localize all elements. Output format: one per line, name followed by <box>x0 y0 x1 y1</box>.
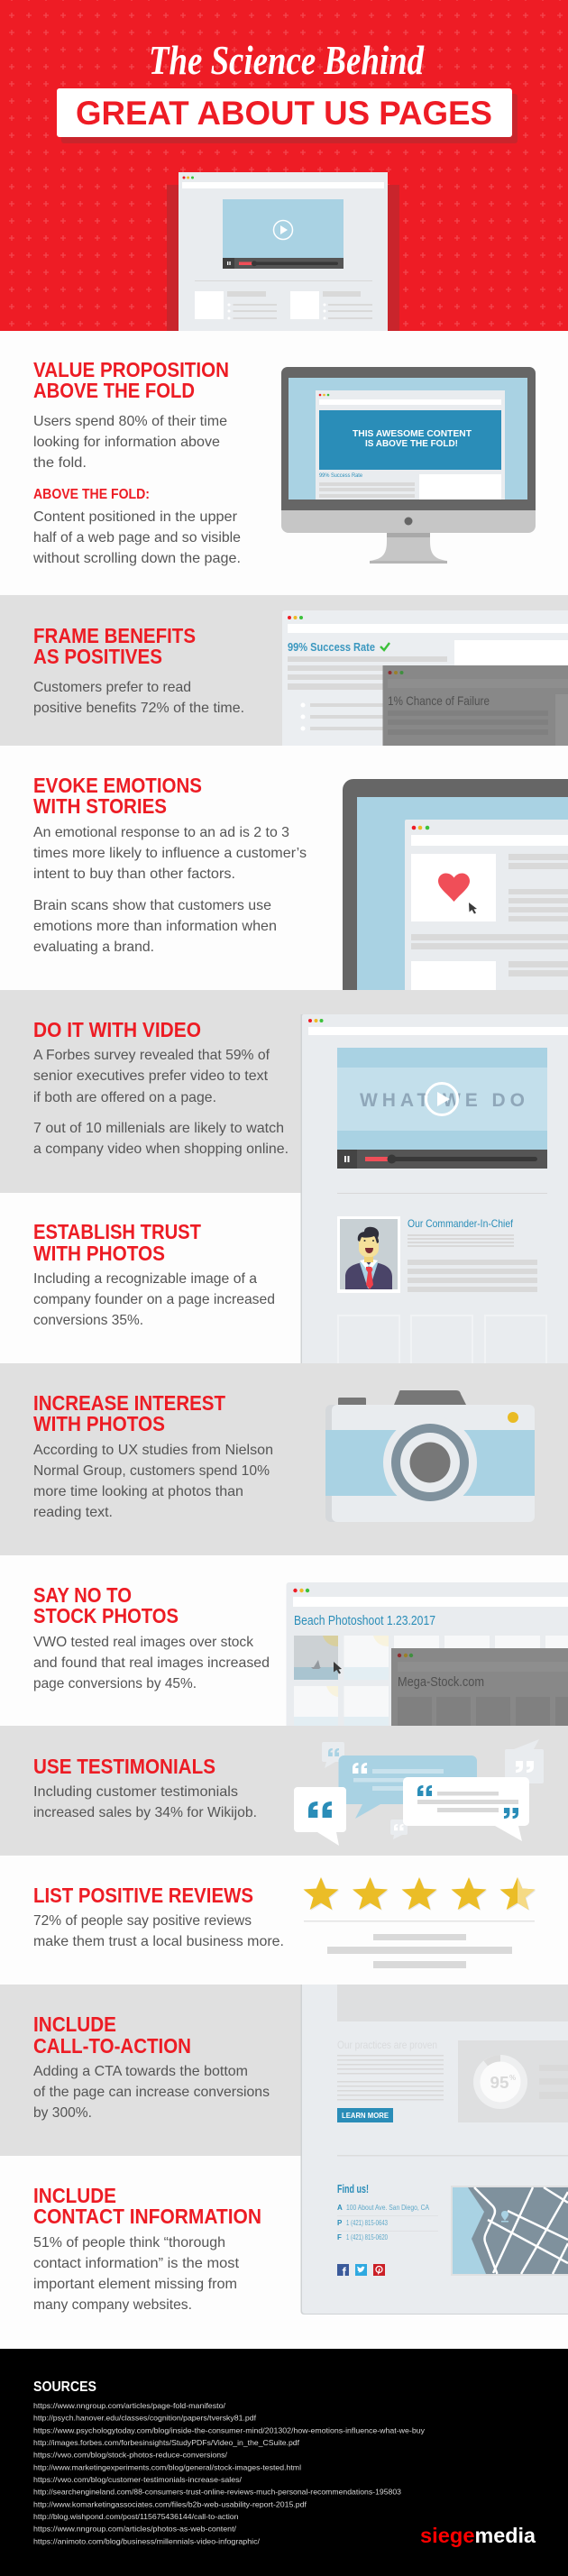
body text <box>33 1048 289 1157</box>
heading: AS POSITIVES <box>33 645 162 668</box>
heading: WITH PHOTOS <box>33 1242 165 1265</box>
heading: WITH STORIES <box>33 794 167 818</box>
browser: success message: 99% Success Rate <box>288 640 375 654</box>
contact details: 1 (421) 815-0643 <box>346 2218 388 2227</box>
body text: important element missing from <box>33 2277 237 2292</box>
stat card with donut: 95 <box>490 2074 508 2092</box>
browser: real photo gallery: Beach Photoshoot 1.23.2017 <box>294 1613 435 1628</box>
heading: INCREASE INTEREST <box>33 1391 225 1415</box>
body text <box>33 2235 240 2313</box>
body text: and found that real images increased <box>33 1655 270 1671</box>
body text: Customers prefer to read <box>33 680 191 695</box>
body text: many company websites. <box>33 2297 192 2313</box>
heading <box>33 1583 179 1627</box>
body text: company founder on a page increased <box>33 1292 275 1307</box>
blue bubble <box>339 1756 477 1819</box>
heading <box>33 1220 201 1265</box>
body text: Brain scans show that customers use <box>33 898 271 913</box>
panel: value proposition above the fold <box>32 358 536 566</box>
body text <box>33 680 244 716</box>
definition text: Content positioned in the upper <box>33 509 238 525</box>
founder portrait <box>337 1216 400 1293</box>
body text: An emotional response to an ad is 2 to 3 <box>33 825 289 840</box>
sources list: http://images.forbes.com/forbesinsights/StudyPDFs/Video_in_the_CSuite.pdf <box>33 2438 300 2447</box>
panel: increase interest with photos <box>0 1363 568 1555</box>
stat card with donut: % <box>509 2074 516 2082</box>
browser with call to action and contact info: Our practices are proven <box>337 2039 437 2051</box>
white bubble left <box>294 1787 346 1846</box>
body text <box>33 2064 270 2121</box>
body text: contact information” is the most <box>33 2256 240 2271</box>
body text: Adding a CTA towards the bottom <box>33 2064 248 2079</box>
learn more button: LEARN MORE <box>342 2111 389 2120</box>
speech bubbles <box>294 1739 544 1846</box>
stat card with donut <box>458 2040 568 2122</box>
heading <box>33 2012 191 2058</box>
white bubble right <box>403 1777 529 1841</box>
panel: include call-to-action <box>0 1985 568 2315</box>
heading: DO IT WITH VIDEO <box>33 1018 201 1041</box>
body text: if both are offered on a page. <box>33 1090 216 1105</box>
definition text: without scrolling down the page. <box>32 551 241 566</box>
body text <box>33 1913 284 1949</box>
body text: of the page can increase conversions <box>33 2085 270 2100</box>
heading: INCLUDE <box>33 2184 116 2207</box>
founder text <box>408 1217 537 1292</box>
heading: VALUE PROPOSITION <box>33 358 229 381</box>
browser illustration with video <box>167 172 399 331</box>
contact details: Find us! <box>337 2182 369 2196</box>
panel: establish trust with photos <box>33 1220 275 1328</box>
heading: USE TESTIMONIALS <box>33 1755 215 1778</box>
sources list: http://psych.hanover.edu/classes/cognition/papers/tversky81.pdf <box>33 2414 257 2423</box>
subheading: ABOVE THE FOLD: <box>33 487 150 502</box>
heading: WITH PHOTOS <box>33 1412 165 1435</box>
sources list: http://www.marketingexperiments.com/blog/general/stock-images-tested.html <box>33 2462 301 2471</box>
title script line: The Science Behind <box>149 37 425 83</box>
body text: 72% of people say positive reviews <box>33 1913 252 1929</box>
heading: ABOVE THE FOLD <box>33 379 195 402</box>
body text: increased sales by 34% for Wikijob. <box>33 1805 257 1820</box>
body text: make them trust a local business more. <box>33 1934 284 1949</box>
siege media logo <box>420 2524 536 2547</box>
body text: evaluating a brand. <box>33 940 154 955</box>
definition text: half of a web page and so visible <box>33 530 241 545</box>
panel: use testimonials <box>0 1726 568 1856</box>
video player: WHAT WE DO <box>360 1090 525 1111</box>
browser with video and founder <box>301 1014 568 1370</box>
panel: do it with video <box>0 990 568 1370</box>
heading: LIST POSITIVE REVIEWS <box>33 1884 253 1907</box>
body text: more time looking at photos than <box>33 1484 243 1499</box>
sources list: http://searchengineland.com/88-consumers-trust-online-reviews-much-personal-recommendations-195803 <box>33 2488 401 2497</box>
body text <box>33 1271 275 1328</box>
body text: Normal Group, customers spend 10% <box>33 1463 270 1479</box>
browser: success message <box>282 610 568 746</box>
heading <box>33 774 202 818</box>
founder text: Our Commander-In-Chief <box>408 1217 514 1230</box>
heading: CALL-TO-ACTION <box>33 2034 191 2058</box>
video player <box>337 1048 547 1169</box>
panel: frame benefits as positives <box>0 595 568 746</box>
heading: FRAME BENEFITS <box>33 624 196 647</box>
browser: failure message: 1% Chance of Failure <box>388 693 490 708</box>
body text: A Forbes survey revealed that 59% of <box>33 1048 270 1063</box>
body text: 7 out of 10 millenials are likely to watch <box>33 1121 284 1136</box>
siege media logo: siege <box>420 2524 474 2547</box>
body text: emotions more than information when <box>33 919 277 934</box>
body text: intent to buy than other factors. <box>33 866 235 882</box>
icon: cursor <box>469 903 477 914</box>
heading: ESTABLISH TRUST <box>33 1220 201 1243</box>
panel: list positive reviews <box>33 1877 536 1968</box>
body text: VWO tested real images over stock <box>33 1635 254 1650</box>
social icons <box>337 2264 385 2278</box>
sources list: https://www.psychologytoday.com/blog/inside-the-consumer-mind/201302/how-emotions-influence-what-we-buy <box>33 2425 426 2434</box>
sources list: https://www.nngroup.com/articles/photos-as-web-content/ <box>33 2525 237 2534</box>
social icons: f <box>343 2265 346 2278</box>
panel: header <box>0 0 568 331</box>
sources heading: SOURCES <box>33 2379 96 2395</box>
title banner <box>57 88 518 143</box>
contact details <box>337 2182 438 2241</box>
map <box>451 2186 568 2276</box>
panel: evoke emotions with stories <box>33 774 568 990</box>
body text: looking for information above <box>33 435 220 450</box>
browser: stock site <box>391 1648 568 1726</box>
sources list: https://www.nngroup.com/articles/page-fold-manifesto/ <box>33 2401 226 2410</box>
body text: According to UX studies from Nielson <box>33 1443 273 1458</box>
body text: Including a recognizable image of a <box>33 1271 257 1287</box>
body text: conversions 35%. <box>33 1313 143 1328</box>
browser with call to action and contact info <box>301 1985 568 2315</box>
heading <box>33 2184 261 2228</box>
sources list <box>33 2401 426 2545</box>
icon: desktop monitor: THIS AWESOME CONTENT <box>353 428 472 439</box>
sources list: http://blog.wishpond.com/post/115675436144/call-to-action <box>33 2512 239 2521</box>
body text: a company video when shopping online. <box>33 1141 289 1157</box>
body text <box>33 414 227 471</box>
heading: EVOKE EMOTIONS <box>33 774 202 797</box>
body text: by 300%. <box>33 2105 92 2121</box>
body text: senior executives prefer video to text <box>33 1068 269 1084</box>
laptop with heart <box>343 779 568 990</box>
learn more button <box>337 2108 393 2122</box>
body text: the fold. <box>33 455 87 471</box>
body text: Users spend 80% of their time <box>33 414 227 429</box>
faded bubble top left <box>322 1742 344 1768</box>
browser: stock site: Mega-Stock.com <box>398 1674 484 1690</box>
heading: CONTACT INFORMATION <box>33 2205 261 2228</box>
body text: positive benefits 72% of the time. <box>33 701 244 716</box>
sources list: http://www.komarketingassociates.com/files/b2b-web-usability-report-2015.pdf <box>33 2499 307 2508</box>
icon: desktop monitor: IS ABOVE THE FOLD! <box>365 438 458 449</box>
body text <box>33 825 307 955</box>
heading <box>33 624 196 668</box>
contact details: 100 About Ave. San Diego, CA <box>346 2203 429 2212</box>
sources list: https://vwo.com/blog/stock-photos-reduce-conversions/ <box>33 2451 228 2460</box>
title banner: GREAT ABOUT US PAGES <box>76 95 492 132</box>
definition text <box>32 509 241 566</box>
contact details: A <box>337 2204 343 2212</box>
siege media logo: media <box>474 2524 536 2547</box>
icon: cursor <box>334 1662 342 1673</box>
faded bubble top right <box>505 1739 544 1783</box>
sources list: https://vwo.com/blog/customer-testimonials-increase-sales/ <box>33 2475 243 2484</box>
browser: real photo gallery <box>287 1582 568 1726</box>
body text <box>33 1635 270 1691</box>
contact details: 1 (421) 815-0620 <box>346 2232 388 2241</box>
sources list: https://animoto.com/blog/business/millennials-video-infographic/ <box>33 2536 261 2545</box>
icon: desktop monitor: 99% Success Rate <box>319 473 363 479</box>
body text: page conversions by 45%. <box>33 1676 197 1691</box>
heading: INCLUDE <box>33 2012 116 2036</box>
contact details: P <box>337 2219 343 2227</box>
body text: Including customer testimonials <box>33 1784 238 1800</box>
heading <box>33 358 229 402</box>
panel: say no to stock photos <box>33 1582 568 1726</box>
icon: camera <box>325 1390 535 1522</box>
body text: times more likely to influence a customer’s <box>33 846 307 861</box>
body text <box>33 1784 257 1820</box>
review placeholder lines <box>304 1921 535 1968</box>
icon: heart <box>438 873 470 902</box>
body text <box>33 1443 273 1520</box>
panel: include contact information <box>33 2184 261 2313</box>
body text: 51% of people think “thorough <box>33 2235 225 2251</box>
heading <box>33 1391 225 1435</box>
heading: SAY NO TO <box>33 1583 132 1607</box>
icon: desktop monitor <box>281 367 536 564</box>
heading: STOCK PHOTOS <box>33 1604 179 1627</box>
panel: sources footer <box>0 2349 568 2576</box>
faded bubble bottom <box>390 1820 408 1839</box>
body text: reading text. <box>33 1505 113 1520</box>
browser: failure message <box>382 665 568 746</box>
star rating <box>303 1877 536 1911</box>
contact details: F <box>337 2233 342 2241</box>
